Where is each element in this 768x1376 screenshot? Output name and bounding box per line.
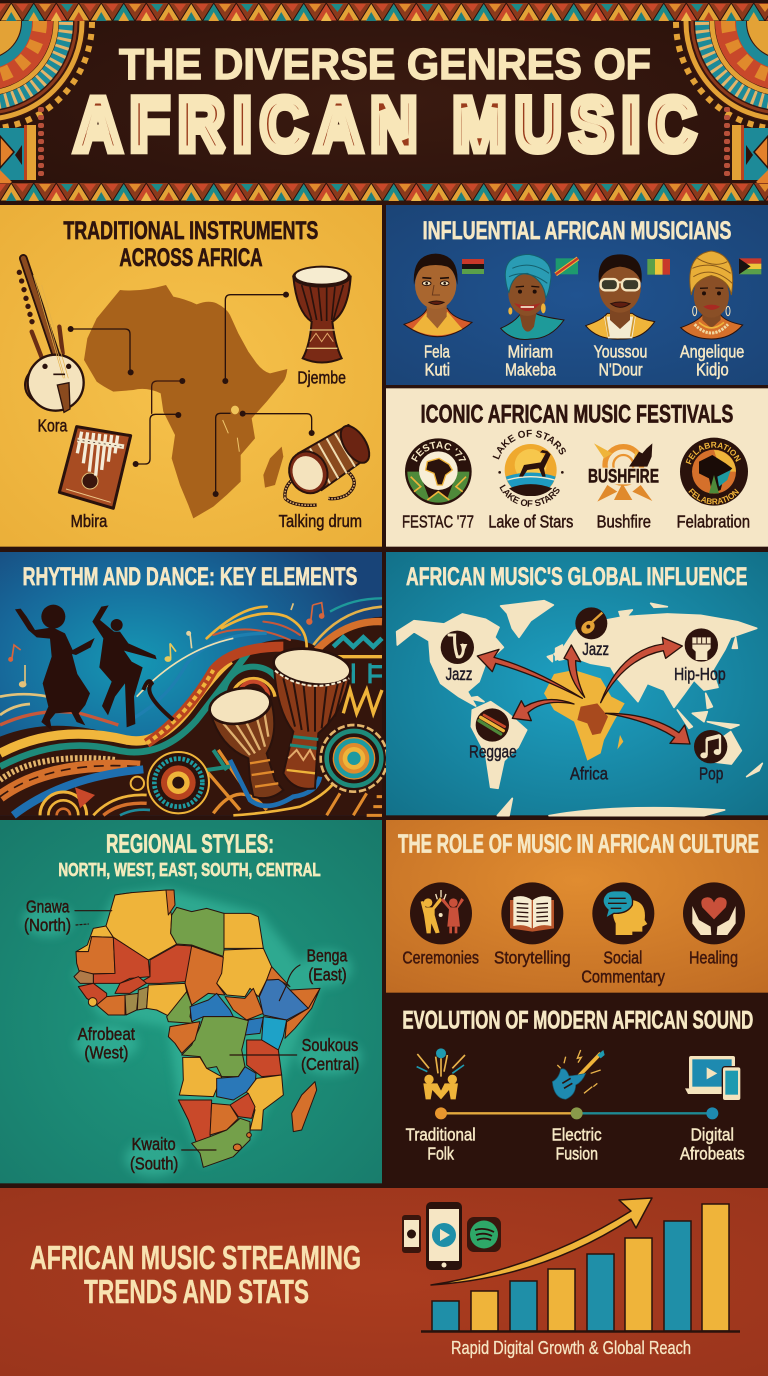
icon: small djembe drum: [207, 684, 283, 798]
logo: Lake of Stars: LAKE OF STARS: [492, 430, 566, 460]
title line two: AFRICAN MUSIC: [75, 84, 695, 166]
world map: [397, 601, 762, 816]
chart caption: Rapid Digital Growth & Global Reach: [451, 1338, 691, 1358]
heading: streaming trends: [30, 1239, 361, 1310]
panel: role of music: [386, 820, 768, 993]
logo: Felabration: FELABRATION: [686, 442, 741, 464]
flag: Fela Kuti: [462, 259, 484, 274]
timeline labels: Afrobeats: [680, 1143, 745, 1163]
region labels: Gnawa: [26, 897, 69, 917]
panel: evolution of sound: [386, 993, 768, 1183]
icon: djembe: [292, 266, 351, 362]
flag: Angelique Kidjo: [739, 258, 761, 274]
growth arrow: [431, 1198, 652, 1285]
icon: electric guitar: [552, 1050, 605, 1099]
names of musicians: [424, 342, 744, 380]
top triangle border: [0, 3, 768, 21]
role labels: Storytelling: [494, 947, 571, 967]
icon: traditional folk: [417, 1048, 465, 1099]
map labels: Reggae: [469, 741, 517, 761]
timeline labels: Folk: [427, 1143, 455, 1163]
icon: streaming app: [467, 1217, 501, 1252]
names of musicians: N'Dour: [599, 360, 643, 380]
icon: reggae stripes: [476, 708, 509, 742]
icon: storytelling: [501, 882, 563, 944]
label: Kora: Kora: [38, 416, 67, 436]
festival names: Lake of Stars: [488, 511, 573, 531]
timeline labels: [406, 1125, 745, 1163]
map labels: Africa: [570, 763, 608, 783]
icon: guitar: [575, 607, 607, 639]
bottom triangle border: [0, 183, 768, 201]
portrait: Angelique Kidjo: [681, 251, 743, 339]
region labels: (West): [84, 1043, 128, 1063]
role labels: Social: [603, 947, 642, 967]
map labels: Jazz: [582, 639, 609, 659]
timeline labels: Fusion: [556, 1143, 598, 1163]
bar chart: [421, 1204, 740, 1332]
icon: ceremonies: [410, 882, 472, 944]
heading: regional styles: [58, 829, 321, 880]
festival names: Bushfire: [597, 511, 651, 531]
map labels: Pop: [699, 763, 723, 783]
names of musicians: Angelique: [680, 342, 744, 362]
flag: Youssou N'Dour: [647, 259, 670, 275]
icon: saxophone: [441, 631, 474, 664]
map: Africa silhouette: [84, 285, 287, 518]
logo: Lake of Stars: LAKE OF STARS: [500, 484, 560, 507]
panel: traditional instruments: [0, 205, 382, 547]
map: African countries: [74, 890, 320, 1167]
role labels: [402, 947, 738, 986]
panel: rhythm and dance: [0, 552, 387, 815]
portrait: Miriam Makeba: [501, 254, 564, 339]
leader lines: [75, 911, 300, 1150]
region labels: Benga: [307, 946, 347, 966]
icon: music note: [694, 730, 727, 763]
heading: streaming trends: TRENDS AND STATS: [84, 1273, 309, 1310]
icon: small phone: [402, 1215, 421, 1253]
map labels: [446, 639, 726, 783]
timeline labels: Electric: [552, 1125, 602, 1145]
heading: regional styles: REGIONAL STYLES:: [106, 829, 274, 859]
panel: streaming trends: [0, 1188, 768, 1376]
title line one: THE DIVERSE GENRES OF: [119, 40, 651, 89]
panel: regional styles: [0, 820, 382, 1183]
arrows: [477, 637, 690, 744]
logo: Lake of Stars: [492, 430, 566, 507]
region labels: (North): [24, 915, 71, 935]
region labels: (South): [130, 1153, 178, 1173]
icon: talking drum: [282, 421, 375, 505]
right corner ornament: [676, 0, 768, 190]
heading: rhythm and dance: RHYTHM AND DANCE: KEY ELEMENTS: [23, 563, 357, 591]
icon: mbira: [59, 427, 131, 508]
header banner: [0, 0, 768, 205]
heading: regional styles: NORTH, WEST, EAST, SOUTH, CENTRAL: [58, 859, 321, 880]
icon: raised fist: [685, 628, 718, 662]
left corner ornament: [0, 0, 92, 190]
region labels: Afrobeat: [78, 1024, 135, 1044]
names of musicians: Miriam: [508, 342, 553, 362]
region labels: (Central): [301, 1054, 359, 1074]
logo: FESTAC 77: FESTAC '77: [411, 441, 466, 462]
icon: kora: [17, 258, 84, 412]
logo: Felabration: FELABRATION: [688, 488, 740, 504]
role labels: Ceremonies: [402, 947, 479, 967]
map labels: Jazz: [446, 664, 472, 684]
role labels: Healing: [689, 947, 738, 967]
label: Djembe: Djembe: [297, 368, 346, 388]
map: Africa highlight: [544, 670, 625, 761]
region labels: Kwaito: [132, 1134, 176, 1154]
logo: Bushfire: BUSHFIRE: [588, 467, 659, 488]
heading: traditional instruments: TRADITIONAL INSTRUMENTS: [63, 217, 318, 245]
panel: global influence: [386, 552, 768, 816]
logo: Felabration: [680, 438, 748, 506]
panel: iconic festivals: [386, 388, 768, 547]
names of musicians: Youssou: [594, 342, 647, 362]
flag: Miriam Makeba: [556, 258, 578, 274]
label: Mbira: Mbira: [71, 511, 107, 531]
portrait: Fela Kuti: [404, 254, 472, 337]
timeline labels: Traditional: [406, 1125, 476, 1145]
label: Talking drum: Talking drum: [279, 511, 362, 531]
region labels: Soukous: [302, 1035, 358, 1055]
concentric circle ornaments: [75, 725, 387, 813]
heading: streaming trends: AFRICAN MUSIC STREAMING: [30, 1239, 361, 1276]
icon: large djembe drum: [271, 644, 353, 789]
names of musicians: Makeba: [505, 360, 556, 380]
names of musicians: Fela: [424, 342, 450, 362]
portrait: Youssou N'Dour: [586, 254, 655, 339]
timeline labels: Digital: [691, 1125, 734, 1145]
festival names: FESTAC '77: [402, 511, 474, 531]
region labels: [24, 897, 359, 1173]
heading: traditional instruments: [63, 217, 318, 272]
logo: Bushfire: [588, 443, 659, 502]
music notes: [9, 603, 324, 687]
region labels: (East): [308, 965, 347, 985]
panel: influential musicians: [386, 205, 768, 385]
icon: laptop and phone: [685, 1056, 741, 1101]
timeline: [435, 1107, 718, 1119]
label glows: [23, 888, 362, 1177]
leader lines: [68, 292, 315, 497]
festival names: [402, 511, 750, 531]
icon: large phone: [426, 1202, 462, 1270]
names of musicians: Kidjo: [696, 360, 729, 380]
icon: social commentary: [592, 882, 654, 944]
dancer silhouettes: [15, 605, 173, 731]
festival names: Felabration: [677, 511, 750, 531]
role labels: Commentary: [581, 966, 665, 986]
rainbow arcs: [223, 637, 382, 713]
patterned waves: [0, 598, 382, 815]
names of musicians: Kuti: [425, 360, 450, 380]
heading: traditional instruments: ACROSS AFRICA: [119, 244, 263, 272]
icon: healing: [683, 882, 745, 944]
logo: FESTAC 77: [405, 438, 472, 505]
map labels: Hip-Hop: [674, 664, 726, 684]
